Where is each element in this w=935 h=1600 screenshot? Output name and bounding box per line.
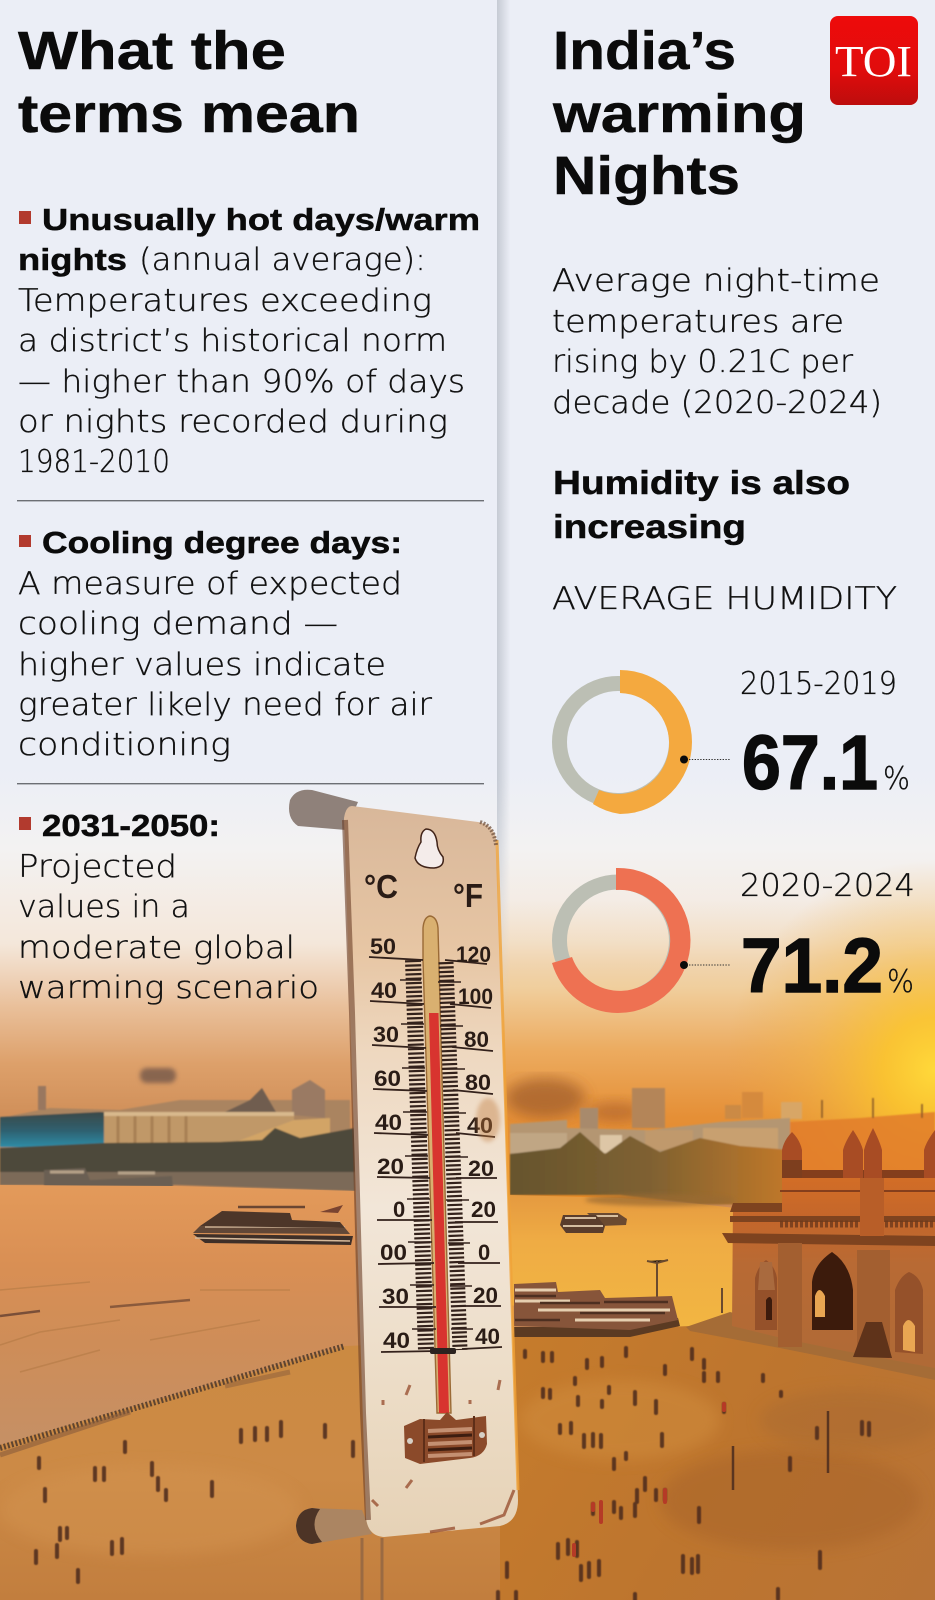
- scale numbers: 00: [380, 1240, 407, 1265]
- heading: what the terms mean: [18, 21, 360, 144]
- scale numbers: 40: [371, 978, 397, 1003]
- stat: 2015-2019 67.1%: 67.1: [742, 720, 878, 806]
- people on the promenade: [36, 1348, 869, 1600]
- term: 2031-2050: [18, 808, 319, 1006]
- text: night-time temperature trend: temperatures are: [552, 304, 844, 340]
- ground left: [0, 1340, 510, 1600]
- term: unusually hot days: nights: [18, 242, 127, 277]
- term: unusually hot days: 1981-2010: [18, 444, 170, 480]
- red mercury column: [429, 1013, 449, 1413]
- arches: [812, 1252, 853, 1330]
- heading: what the terms mean: What the: [18, 21, 286, 81]
- water left: [0, 1185, 355, 1450]
- stat: 2015-2019 67.1%: 2015-2019: [740, 666, 897, 702]
- scale numbers: 20: [471, 1197, 496, 1222]
- panel: India's warming nights: [552, 16, 918, 1013]
- scale numbers: 120: [456, 942, 491, 967]
- term: cooling degree days: conditioning: [18, 727, 231, 763]
- promenade lamp posts: [733, 1411, 828, 1490]
- bottom peg: [296, 1508, 372, 1544]
- scale numbers: 80: [464, 1027, 489, 1052]
- tick marks: [369, 957, 502, 1352]
- scale numbers: 20: [377, 1154, 404, 1179]
- term: unusually hot days: (annual average):: [139, 242, 426, 278]
- heading: India's warming Nights: warming: [552, 84, 806, 144]
- water right: [510, 1195, 735, 1330]
- term: 2031-2050: warming scenario: [18, 970, 319, 1006]
- keyhole: [415, 829, 443, 868]
- stat: 2020-2024 71.2%: 2020-2024: [740, 868, 915, 904]
- term: unusually hot days: — higher than 90% of days: [18, 364, 465, 400]
- small boats: [560, 1213, 627, 1233]
- term: unusually hot days: or nights recorded during: [18, 404, 448, 440]
- term: cooling degree days: cooling demand —: [18, 606, 338, 642]
- stat: 2015-2019 67.1%: [740, 666, 910, 806]
- text: night-time temperature trend: decade (2020-2024): [552, 385, 882, 421]
- text: night-time temperature trend: Average night-time: [552, 263, 880, 299]
- heading: India's warming Nights: Nights: [553, 146, 740, 206]
- text: night-time temperature trend: [552, 263, 882, 421]
- domes: [782, 1128, 935, 1178]
- scale numbers: 80: [465, 1070, 491, 1095]
- scale numbers: 60: [374, 1066, 401, 1091]
- TOI logo: [830, 16, 918, 105]
- scale numbers: 30: [382, 1284, 409, 1309]
- donut chart: 2015-2019: [560, 670, 730, 814]
- unit labels: [364, 868, 483, 914]
- scale numbers: 30: [373, 1022, 399, 1047]
- scale numbers: 40: [467, 1113, 493, 1138]
- skyline left: [0, 1068, 355, 1191]
- term: unusually hot days: [18, 202, 480, 480]
- unit labels: °C: [364, 868, 398, 905]
- text: night-time temperature trend: rising by 0.21C per: [552, 344, 853, 380]
- stat: 2015-2019 67.1%: %: [883, 761, 910, 797]
- lamp posts on water: [647, 1260, 722, 1313]
- term: unusually hot days: a district’s historical norm: [18, 323, 447, 359]
- heading: India's warming Nights: India’s: [553, 21, 736, 81]
- stat: 2020-2024 71.2%: %: [887, 964, 914, 1000]
- ferries: [514, 1282, 680, 1337]
- scale numbers: 20: [468, 1156, 494, 1181]
- stat: 2020-2024 71.2%: 71.2: [741, 923, 883, 1009]
- term: unusually hot days: Unusually hot days/warm: [42, 202, 480, 237]
- scale numbers: 0: [393, 1197, 405, 1222]
- rusty bracket: [404, 1412, 487, 1464]
- term: 2031-2050: 2031-2050:: [42, 808, 220, 843]
- scale numbers: 40: [375, 1110, 402, 1135]
- heading: what the terms mean: terms mean: [18, 84, 360, 144]
- term: cooling degree days: [18, 525, 432, 763]
- heading: India's warming Nights: [552, 21, 806, 206]
- term: 2031-2050: values in a: [18, 889, 190, 925]
- scale numbers: 40: [383, 1328, 410, 1353]
- term: cooling degree days: A measure of expected: [18, 566, 402, 602]
- vertical column divider: [497, 0, 508, 957]
- rust specks: [372, 1380, 514, 1532]
- subheading: humidity: [553, 464, 850, 545]
- term: 2031-2050: Projected: [18, 849, 177, 885]
- subheading: humidity: increasing: [553, 508, 746, 545]
- panel: what the terms mean: [17, 21, 484, 1006]
- unit labels: °F: [453, 877, 483, 914]
- stat: 2020-2024 71.2%: [740, 868, 915, 1009]
- donut chart: 2020-2024: [552, 868, 730, 1013]
- scale numbers: 50: [370, 934, 396, 959]
- term: cooling degree days: greater likely need for air: [18, 687, 432, 723]
- thermometer body: [344, 806, 518, 1537]
- term: unusually hot days: Temperatures exceeding: [18, 283, 432, 319]
- skyline right: [505, 1078, 935, 1205]
- top peg: [289, 790, 358, 830]
- tube clip: [430, 1348, 456, 1354]
- ground right: [500, 1326, 935, 1600]
- ship left: [193, 1205, 353, 1245]
- rust patch: [476, 1098, 500, 1142]
- scale numbers: 40: [475, 1324, 500, 1349]
- term: cooling degree days: Cooling degree days:: [42, 525, 402, 560]
- scale numbers: [370, 934, 500, 1353]
- drips below thermometer: [362, 1538, 382, 1600]
- term: 2031-2050: moderate global: [18, 930, 295, 966]
- TOI logo: TOI: [835, 37, 912, 86]
- label: average humidity: AVERAGE HUMIDITY: [552, 581, 897, 617]
- scale numbers: 20: [473, 1283, 498, 1308]
- background photo: Mumbai waterfront at sunset: [0, 860, 935, 1600]
- thermometer: [289, 790, 518, 1600]
- scale numbers: 100: [458, 984, 493, 1009]
- term: cooling degree days: higher values indicate: [18, 647, 386, 683]
- Gateway of India: [686, 1128, 935, 1380]
- subheading: humidity: Humidity is also: [553, 464, 850, 501]
- glass tube: [423, 916, 451, 1413]
- scale numbers: 0: [478, 1240, 490, 1265]
